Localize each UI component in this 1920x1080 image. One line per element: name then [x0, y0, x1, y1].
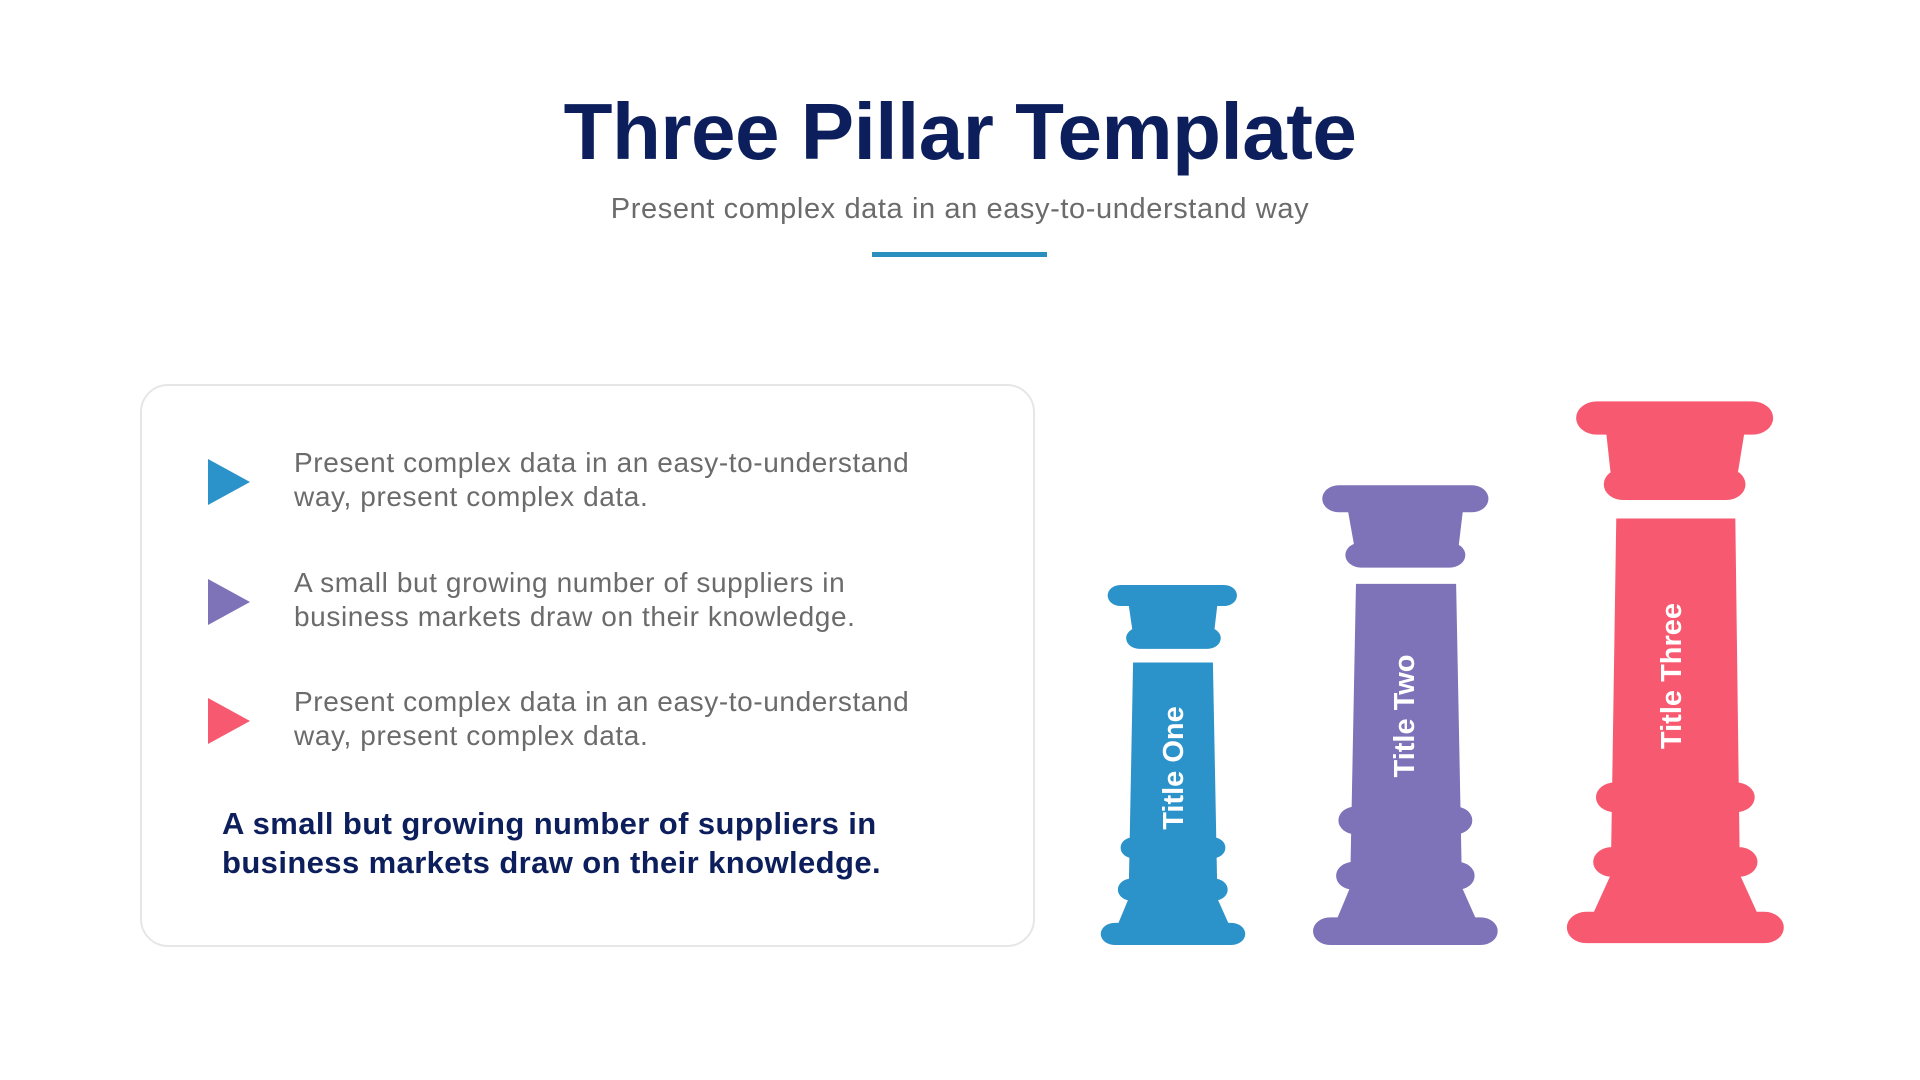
- label: Title One: Title One: [1158, 706, 1190, 830]
- title: Three Pillar Template: [564, 87, 1356, 176]
- icon: purple triangle: [208, 579, 250, 625]
- bullet 1: [208, 447, 909, 512]
- text 3: [294, 686, 909, 751]
- text 3: Present complex data in an easy-to-understand: [294, 686, 909, 717]
- pillar three: [1567, 401, 1784, 943]
- bold summary: business markets draw on their knowledge.: [222, 845, 881, 880]
- text 1: way, present complex data.: [294, 481, 648, 512]
- text 1: [294, 447, 909, 512]
- pillar two: [1313, 485, 1498, 945]
- pillar one: [1101, 585, 1245, 945]
- label: Title Two: Title Two: [1389, 655, 1421, 777]
- panel: text box: [140, 384, 1035, 947]
- bold summary: A small but growing number of suppliers in: [222, 806, 877, 841]
- icon: red triangle: [208, 698, 250, 744]
- underline accent: [872, 252, 1047, 257]
- text 2: business markets draw on their knowledge.: [294, 601, 856, 632]
- bullet 2: [208, 567, 856, 632]
- label: Title Three: Title Three: [1656, 603, 1688, 749]
- bold summary: [222, 806, 881, 880]
- text 3: way, present complex data.: [294, 720, 648, 751]
- text 2: [294, 567, 856, 632]
- icon: blue triangle: [208, 459, 250, 505]
- text 1: Present complex data in an easy-to-understand: [294, 447, 909, 478]
- text 2: A small but growing number of suppliers in: [294, 567, 845, 598]
- bullet 3: [208, 686, 909, 751]
- subtitle: Present complex data in an easy-to-understand way: [611, 193, 1309, 225]
